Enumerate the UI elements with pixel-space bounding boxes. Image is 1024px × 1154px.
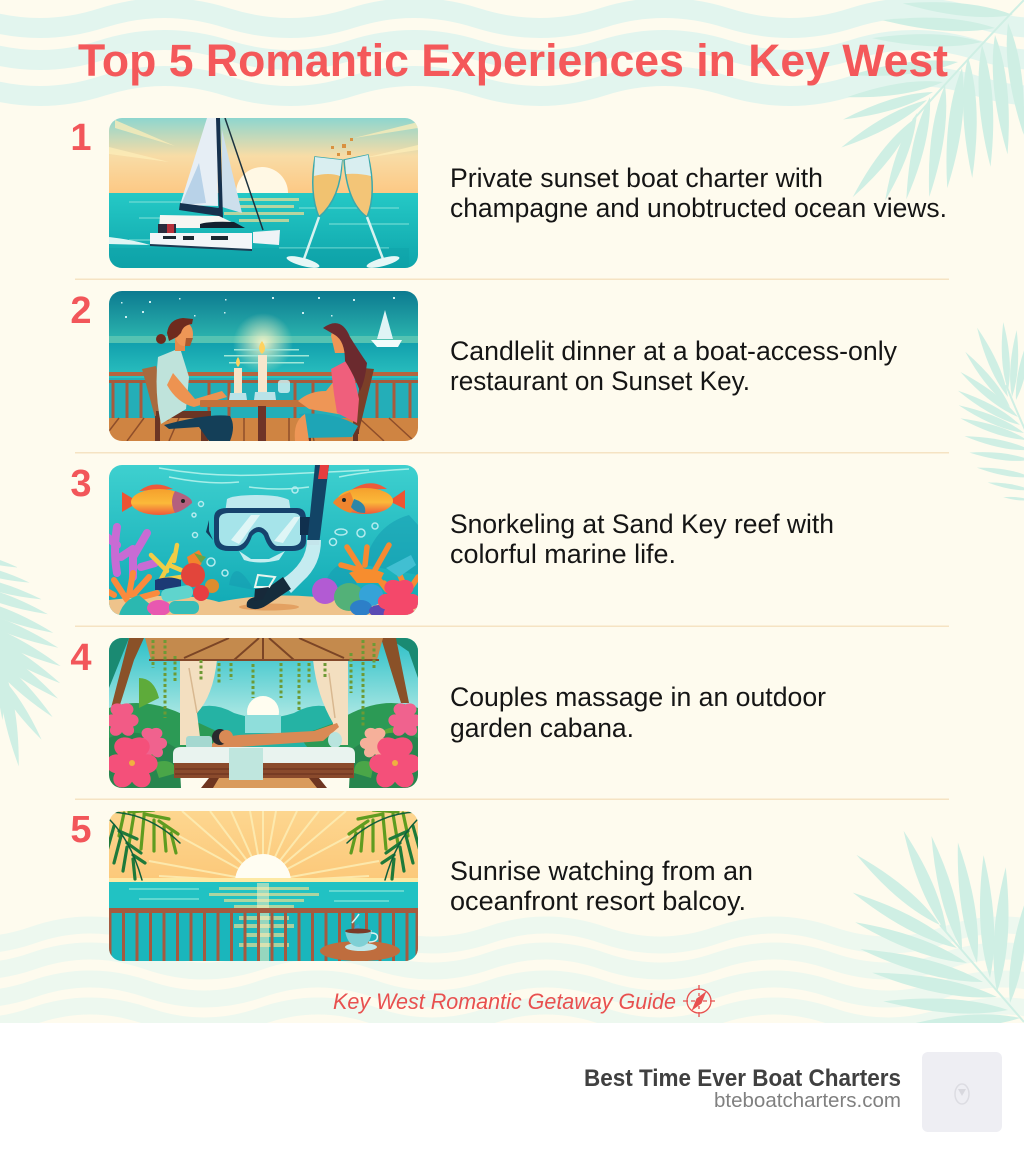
item 3: snorkeling	[70, 463, 834, 621]
brand name: Best Time Ever Boat Charters	[584, 1065, 901, 1092]
illustration: garden cabana massage	[105, 638, 422, 788]
divider 1	[75, 278, 949, 280]
description 2: restaurant on Sunset Key.	[450, 366, 750, 396]
divider 4	[75, 798, 949, 800]
item 1: sunset boat charter	[70, 117, 947, 270]
illustration: sunrise over balcony railing	[107, 810, 420, 961]
item 2: candlelit dinner	[70, 290, 897, 441]
description 2	[450, 336, 897, 396]
number 5: 5	[70, 809, 92, 851]
description 1: Private sunset boat charter with	[450, 163, 823, 193]
description 5: oceanfront resort balcoy.	[450, 886, 746, 916]
divider 3	[75, 626, 949, 627]
footer bar	[0, 1023, 1024, 1154]
description 1	[450, 163, 947, 223]
illustration: sailing catamaran and champagne	[109, 118, 418, 270]
guide caption: Key West Romantic Getaway Guide	[333, 989, 676, 1014]
number 1: 1	[70, 117, 92, 159]
description 3: Snorkeling at Sand Key reef with	[450, 509, 834, 539]
item 5: sunrise balcony	[70, 809, 753, 961]
description 4: garden cabana.	[450, 713, 634, 743]
brand website: bteboatcharters.com	[714, 1090, 901, 1112]
description 3: colorful marine life.	[450, 539, 676, 569]
description 3	[450, 509, 834, 569]
description 5	[450, 856, 753, 916]
logo placeholder	[922, 1052, 1002, 1132]
illustration: couple at candlelit table	[109, 291, 418, 441]
divider 2	[75, 452, 949, 454]
item 4: couples massage	[70, 637, 826, 788]
number 4: 4	[70, 637, 92, 679]
footer background	[0, 1023, 1024, 1154]
icon: compass	[683, 985, 715, 1017]
description 1: champagne and unobtructed ocean views.	[450, 193, 947, 223]
description 5: Sunrise watching from an	[450, 856, 753, 886]
description 4: Couples massage in an outdoor	[450, 682, 826, 712]
number 2: 2	[70, 290, 92, 332]
illustration: snorkel mask and reef	[105, 465, 420, 621]
number 3: 3	[70, 463, 92, 505]
title: Top 5 Romantic Experiences in Key West	[78, 35, 948, 86]
description 2: Candlelit dinner at a boat-access-only	[450, 336, 897, 366]
description 4	[450, 682, 826, 743]
